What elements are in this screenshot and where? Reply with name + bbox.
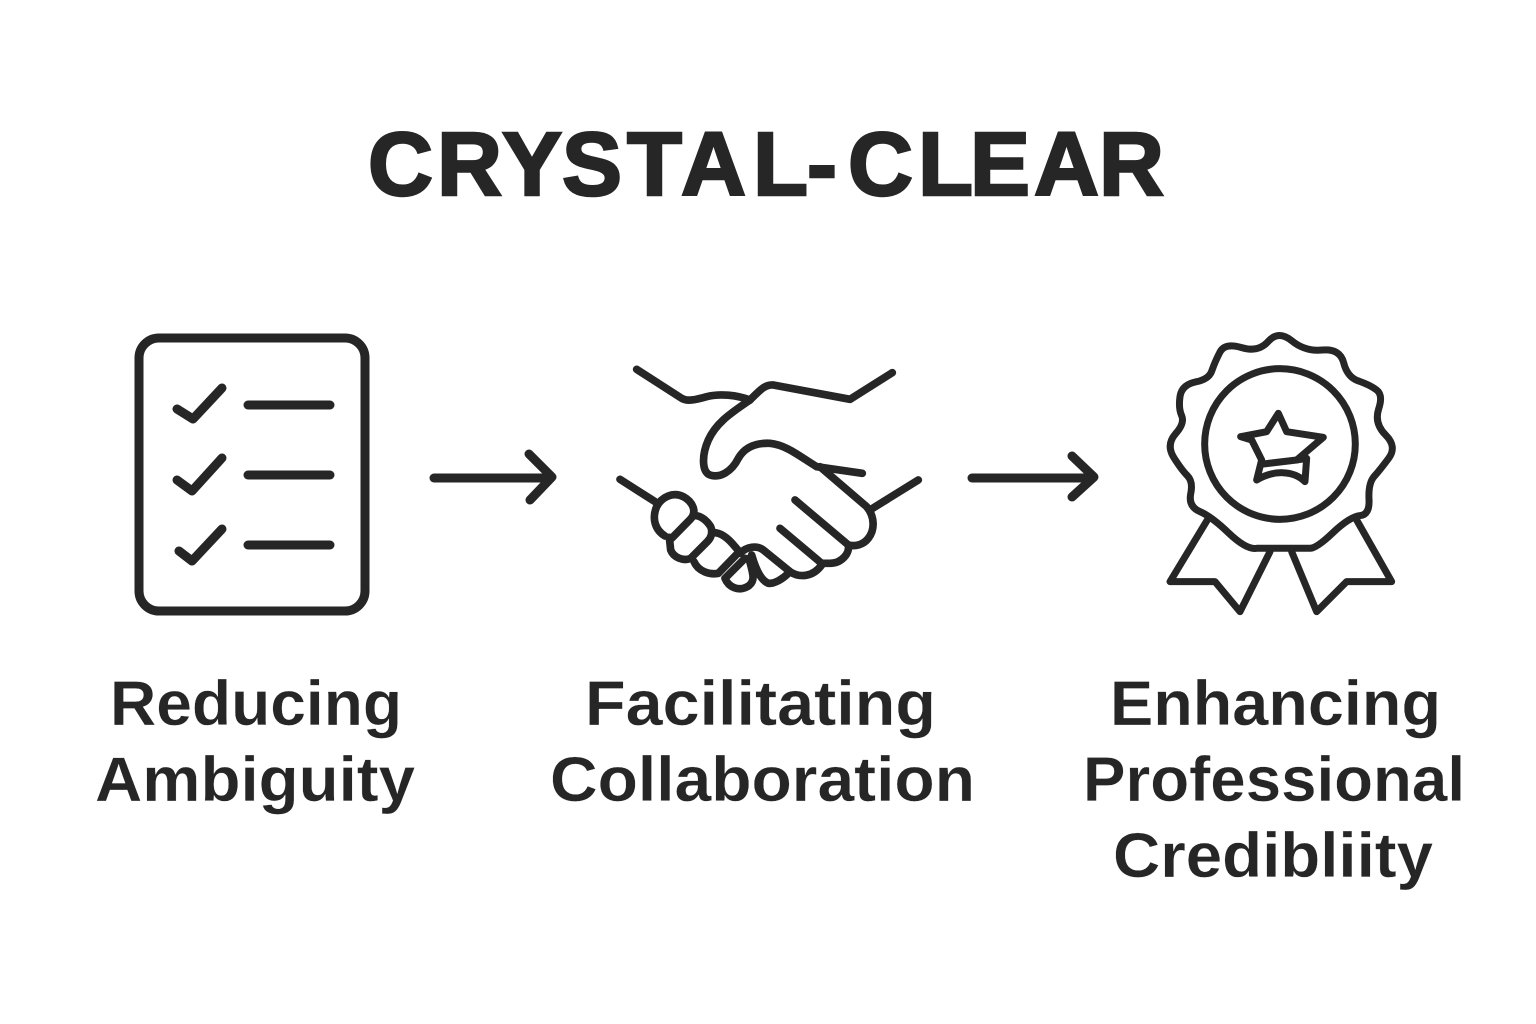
label: Enhancing Professional Credibliity: Credibliity bbox=[1113, 821, 1433, 891]
label: Enhancing Professional Credibliity: Professional bbox=[1083, 745, 1465, 815]
icon: handshake bbox=[620, 369, 918, 589]
icon: checklist bbox=[139, 338, 365, 611]
label: Facilitating Collaboration: Collaboration bbox=[550, 745, 975, 815]
arrow: handshake to badge bbox=[972, 456, 1094, 497]
label: Reducing Ambiguity bbox=[95, 669, 415, 815]
label: Reducing Ambiguity: Ambiguity bbox=[95, 745, 415, 815]
label: Enhancing Professional Credibliity bbox=[1083, 669, 1465, 891]
label: Reducing Ambiguity: Reducing bbox=[110, 669, 402, 739]
icon: award badge bbox=[1170, 335, 1392, 612]
arrow: checklist to handshake bbox=[434, 454, 552, 500]
label: Facilitating Collaboration bbox=[550, 669, 975, 815]
label: Facilitating Collaboration: Facilitating bbox=[585, 669, 936, 739]
title: CRYSTAL-CLEAR bbox=[368, 115, 1164, 215]
label: Enhancing Professional Credibliity: Enhancing bbox=[1110, 669, 1441, 739]
